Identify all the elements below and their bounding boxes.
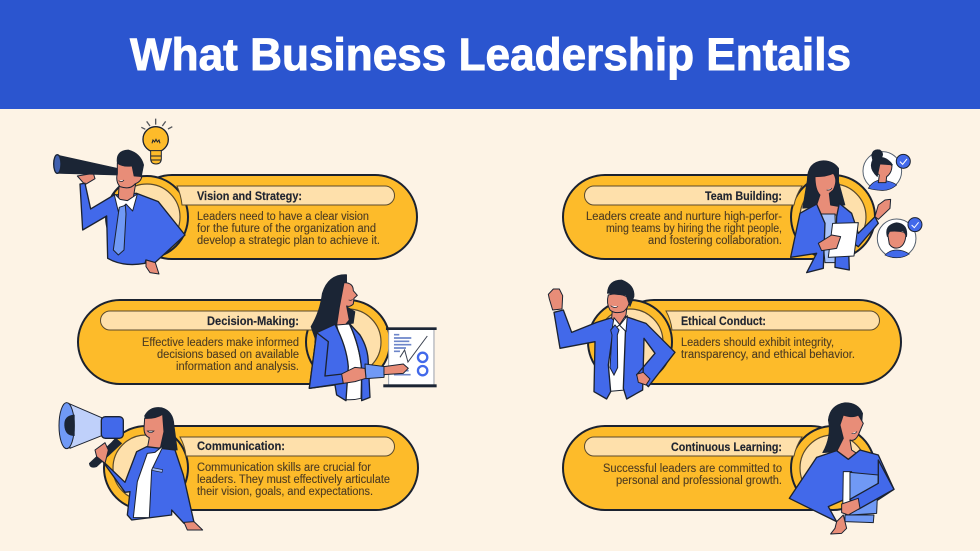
pill background — [130, 426, 418, 510]
panel: Team Building — [563, 150, 922, 273]
heading: Continuous Learning: — [671, 440, 782, 454]
pill background — [563, 175, 853, 259]
heading bar — [180, 437, 395, 456]
panel: Ethical Conduct — [548, 280, 901, 399]
body text: decisions based on available — [157, 349, 299, 361]
panel: Vision and Strategy — [54, 119, 417, 274]
body text: develop a strategic plan to achieve it. — [197, 235, 380, 247]
heading: Vision and Strategy: — [197, 189, 302, 203]
heading: Communication: — [197, 439, 285, 453]
panel: Continuous Learning — [563, 403, 894, 534]
body text: Communication skills are crucial for — [197, 462, 371, 474]
illustration: woman presenting — [309, 275, 408, 401]
heading bar — [666, 311, 880, 330]
body text — [142, 337, 299, 373]
heading bar — [584, 186, 802, 205]
body text: and fostering collaboration. — [648, 235, 782, 247]
icon: team member with check (top) — [863, 150, 910, 190]
illustration: woman with megaphone — [59, 403, 203, 530]
body text — [197, 211, 380, 247]
chart board — [383, 327, 437, 387]
body text: for the future of the organization and — [197, 223, 376, 235]
body text: Leaders create and nurture high-perfor- — [586, 211, 782, 223]
icon: light bulb — [141, 119, 172, 164]
body text — [197, 462, 390, 498]
heading: Decision-Making: — [207, 314, 299, 328]
circle backdrop — [106, 176, 188, 258]
circle backdrop — [104, 426, 188, 510]
body text: ming teams by hiring the right people, — [606, 223, 782, 235]
body text: Effective leaders make informed — [142, 337, 299, 349]
panel: Decision-Making — [78, 275, 437, 401]
circle backdrop — [588, 300, 672, 384]
illustration: man with telescope — [54, 150, 185, 274]
heading bar — [100, 311, 320, 330]
illustration: woman with books — [789, 403, 894, 534]
panel: Communication — [59, 403, 418, 530]
pill background — [563, 426, 853, 510]
circle backdrop — [306, 300, 390, 384]
circle backdrop — [791, 175, 875, 259]
circle backdrop — [791, 426, 875, 510]
heading bar — [177, 186, 395, 205]
body text: their vision, goals, and expectations. — [197, 486, 373, 498]
pill background — [612, 300, 901, 384]
body text: leaders. They must effectively articulate — [197, 474, 390, 486]
body text: Leaders should exhibit integrity, — [681, 337, 834, 349]
body text — [681, 337, 855, 361]
pill background — [78, 300, 368, 384]
title: What Business Leadership Entails — [130, 29, 851, 80]
body text: information and analysis. — [176, 361, 299, 373]
body text — [603, 463, 782, 487]
heading: Team Building: — [705, 189, 782, 203]
body text: transparency, and ethical behavior. — [681, 349, 855, 361]
heading: Ethical Conduct: — [681, 314, 766, 328]
header band — [0, 0, 980, 109]
heading bar — [584, 437, 802, 456]
illustration: man waving — [548, 280, 675, 399]
body text: personal and professional growth. — [616, 475, 782, 487]
body text: Leaders need to have a clear vision — [197, 211, 369, 223]
illustration: woman with paper — [791, 161, 891, 273]
body text: Successful leaders are committed to — [603, 463, 782, 475]
icon: team member with check (bottom) — [877, 218, 922, 258]
pill background — [130, 175, 417, 259]
body text — [586, 211, 782, 247]
